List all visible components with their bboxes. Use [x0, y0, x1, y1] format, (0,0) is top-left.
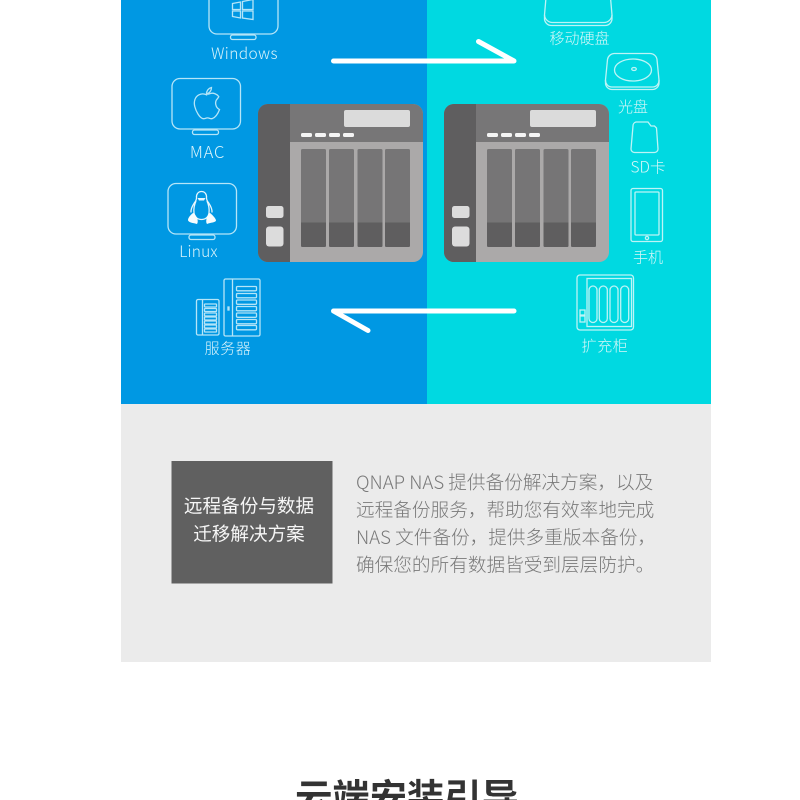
label: 光盘: 光盘 [618, 96, 648, 117]
label: SD卡: SD卡 [631, 156, 665, 178]
label: 扩充柜: 扩充柜 [582, 335, 628, 356]
NAS unit: right [444, 104, 609, 262]
heading: line 2: 迁移解决方案 [193, 520, 305, 546]
label: 手机: 手机 [633, 246, 663, 268]
icon: Linux monitor [168, 184, 236, 240]
label: 移动硬盘: 移动硬盘 [549, 28, 610, 48]
label: Linux: Linux [179, 240, 218, 262]
icon: phone [631, 188, 662, 242]
panel: grey description [121, 404, 711, 662]
label: MAC: MAC [190, 139, 225, 163]
heading: line 1: 远程备份与数据 [184, 492, 314, 518]
text block: description: 远程备份服务，帮助您有效率地完成 [356, 496, 654, 522]
text block: description: QNAP NAS 提供备份解决方案，以及 [356, 468, 653, 495]
callout: dark heading box [172, 461, 332, 584]
text block: description: NAS 文件备份，提供多重版本备份， [356, 523, 656, 550]
NAS unit: left [258, 104, 423, 262]
panel: cyan backup targets [427, 0, 711, 404]
icon: SD card [631, 122, 658, 152]
text block: description [356, 468, 656, 578]
icon: Windows monitor [209, 0, 278, 40]
label: 服务器: 服务器 [205, 338, 251, 358]
icon: expansion enclosure [577, 275, 634, 330]
icon: MAC monitor [172, 78, 240, 134]
icon: external hard drive [544, 0, 612, 26]
icon: optical disc [605, 53, 659, 90]
arrow: to the left [334, 311, 514, 330]
label: Windows: Windows [211, 42, 278, 64]
text block: description: 确保您的所有数据皆受到层层防护。 [356, 550, 654, 578]
arrow: to the right [334, 42, 514, 61]
icon: servers [196, 279, 260, 336]
panel: blue source devices [121, 0, 427, 404]
